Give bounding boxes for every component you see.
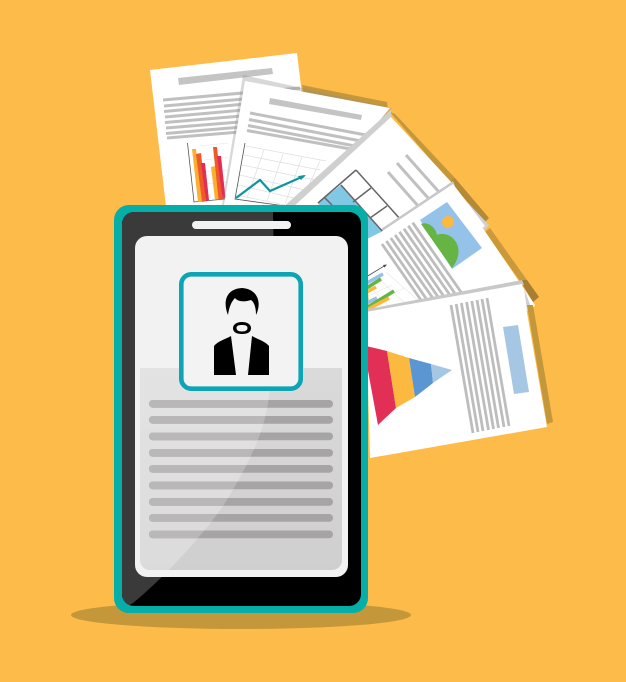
text lines (247, 113, 371, 150)
text lines (451, 298, 509, 433)
document 2: line chart page (224, 81, 390, 215)
document 3: table page (290, 117, 485, 300)
screen (135, 236, 348, 577)
document 3 shadow (390, 112, 455, 186)
document 4 shadow (485, 228, 539, 302)
blue box (503, 325, 529, 394)
icon: person (214, 288, 269, 375)
goatee (233, 322, 251, 334)
speaker (192, 221, 291, 229)
lines (388, 155, 439, 207)
jacket right (248, 336, 269, 375)
document 2 shadow (302, 85, 388, 110)
phone body (114, 205, 368, 613)
table (318, 170, 401, 244)
bar chart (188, 143, 228, 202)
document 5 fold (524, 288, 532, 310)
document 3 corner strip (462, 203, 489, 230)
document 5 shadow (527, 305, 553, 424)
lines reflection (149, 400, 268, 538)
trend line (236, 176, 304, 198)
panel reflection (140, 368, 270, 570)
content panel (140, 368, 342, 570)
grid (236, 146, 326, 205)
hair (226, 288, 259, 315)
document 4 edge (381, 181, 455, 232)
document 3 edge (280, 110, 391, 210)
document 5 edge (368, 280, 524, 313)
ground shadow (71, 601, 411, 629)
profile frame (181, 274, 301, 389)
small chart (365, 264, 420, 312)
image (420, 202, 482, 269)
title bar (178, 68, 273, 85)
smartphone (114, 205, 368, 613)
text lines (382, 223, 461, 313)
document 4 shadow overlap (520, 280, 539, 302)
axes (235, 143, 285, 206)
text lines (163, 88, 300, 138)
document 2 edge shadow (222, 75, 392, 205)
title bar (269, 98, 362, 120)
face reflection (122, 212, 274, 605)
document 5: pyramid page (366, 284, 547, 458)
document 4: image page (365, 184, 535, 320)
document 1: bar chart page (150, 53, 316, 215)
content lines (149, 400, 333, 538)
jacket left (214, 336, 236, 375)
pyramid chart (366, 346, 452, 425)
illustration: smartphone with fanned documents (71, 53, 553, 629)
phone face (122, 212, 361, 606)
document 3 shadow overlap (450, 178, 489, 222)
